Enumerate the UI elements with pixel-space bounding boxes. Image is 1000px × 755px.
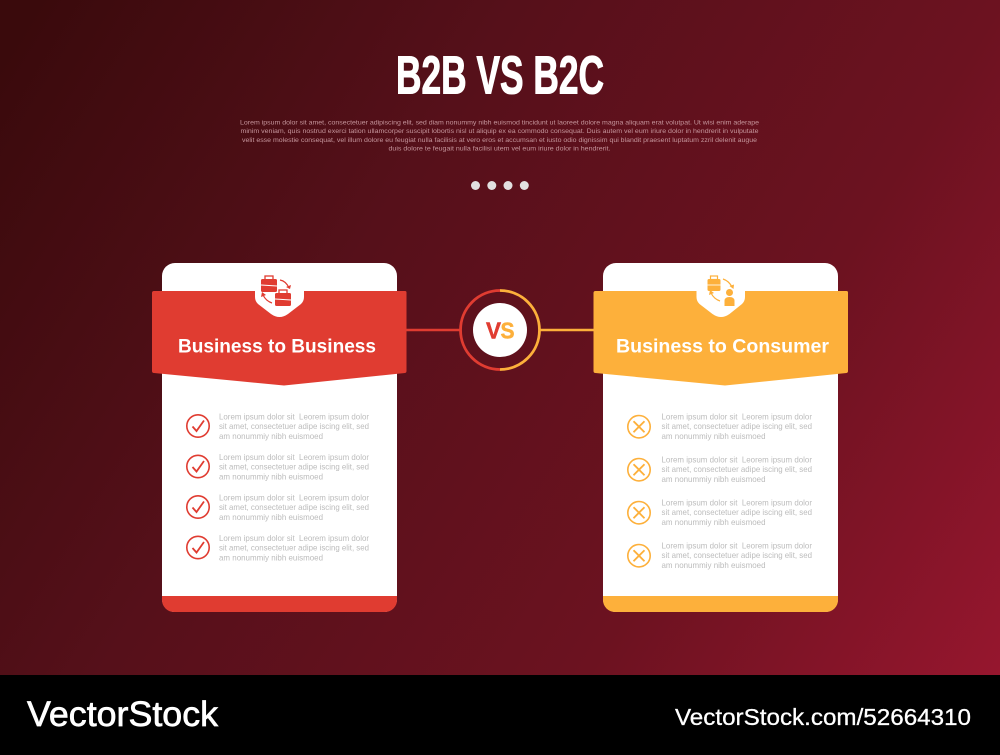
list item 4: Lorem ipsum dolor sit Leorem ipsum dolor <box>219 533 369 543</box>
intro paragraph <box>240 120 759 152</box>
icon: briefcase to person <box>708 276 734 306</box>
list item 4: Lorem ipsum dolor sit Leorem ipsum dolor <box>662 540 812 550</box>
title: B2B VS B2C <box>396 46 604 106</box>
list item 4 <box>628 540 812 570</box>
connector lines <box>406 329 594 331</box>
heading: Business to Consumer <box>616 336 829 358</box>
list item 1: sit amet, consectetuer adipe iscing elit, sed <box>219 421 369 431</box>
footer brand: VectorStock <box>27 695 219 734</box>
list item 2 <box>628 454 812 484</box>
list item 3: Lorem ipsum dolor sit Leorem ipsum dolor <box>219 492 369 502</box>
icon notch <box>696 291 745 317</box>
VS badge <box>461 290 539 370</box>
ribbon header <box>594 291 848 386</box>
list item 4: am nonummiy nibh euismoed <box>219 552 323 562</box>
list item 3: am nonummiy nibh euismoed <box>219 512 323 522</box>
VS badge: S <box>500 318 514 344</box>
panel: business to business <box>152 263 407 612</box>
list item 3: Lorem ipsum dolor sit Leorem ipsum dolor <box>662 498 812 508</box>
list item 1 <box>628 412 812 441</box>
list item 3: sit amet, consectetuer adipe iscing elit, sed <box>219 502 369 512</box>
list item 1 <box>187 412 369 441</box>
intro paragraph: Lorem ipsum dolor sit amet, consectetuer adipiscing elit, sed diam nonummy nibh euismod tincidunt ut laoreet dolore magna aliquam erat volutpat. Ut wisi enim aderape <box>240 120 759 126</box>
intro paragraph: duis dolore te feugait nulla facilisi utem vel eum iriure dolor in hendrerit. <box>388 146 611 152</box>
list item 3 <box>628 498 812 527</box>
footer bar <box>0 675 1000 755</box>
list item 4 <box>187 533 369 562</box>
list item 3: am nonummiy nibh euismoed <box>662 517 766 527</box>
list item 3: sit amet, consectetuer adipe iscing elit, sed <box>662 507 812 517</box>
ribbon header <box>152 291 407 386</box>
footer image link text: VectorStock.com/52664310 <box>675 704 971 730</box>
list item 2: Lorem ipsum dolor sit Leorem ipsum dolor <box>219 452 369 462</box>
card footer bar <box>603 596 838 612</box>
list item 4: sit amet, consectetuer adipe iscing elit, sed <box>662 550 812 560</box>
intro paragraph: minim veniam, quis nostrud exerci tation ullamcorper suscipit lobortis nisl ut aliquip ex ea commodo consequat. Duis autem vel eum iriure dolor in hendrerit in vulputate <box>240 128 759 135</box>
card body <box>603 263 838 612</box>
list item 2: am nonummiy nibh euismoed <box>219 471 323 481</box>
icon notch <box>255 291 304 317</box>
list item 4: sit amet, consectetuer adipe iscing elit, sed <box>219 542 369 552</box>
list item 1: Lorem ipsum dolor sit Leorem ipsum dolor <box>662 412 812 422</box>
list item 1: am nonummiy nibh euismoed <box>219 431 323 441</box>
list item 2: sit amet, consectetuer adipe iscing elit, sed <box>219 462 369 472</box>
list item 2 <box>187 452 369 481</box>
VS badge: V <box>486 318 502 344</box>
list item 1: sit amet, consectetuer adipe iscing elit, sed <box>662 421 812 431</box>
pagination dots <box>471 181 529 190</box>
list item 3 <box>187 492 369 522</box>
icon: briefcases exchange <box>261 276 291 306</box>
list item 2: Lorem ipsum dolor sit Leorem ipsum dolor <box>662 454 812 464</box>
list item 2: sit amet, consectetuer adipe iscing elit, sed <box>662 464 812 474</box>
heading: Business to Business <box>178 336 376 358</box>
card body <box>162 263 397 612</box>
intro paragraph: velit esse molestie consequat, vel illum dolore eu feugiat nulla facilisis at vero eros et accumsan et iusto odio dignissim qui blandit praesent luptatum zzril delenit augue <box>242 137 757 144</box>
list item 4: am nonummiy nibh euismoed <box>662 560 766 570</box>
panel: business to consumer <box>594 263 848 612</box>
list item 2: am nonummiy nibh euismoed <box>662 474 766 484</box>
list item 1: am nonummiy nibh euismoed <box>662 431 766 441</box>
card footer bar <box>162 596 397 612</box>
list item 1: Lorem ipsum dolor sit Leorem ipsum dolor <box>219 412 369 422</box>
